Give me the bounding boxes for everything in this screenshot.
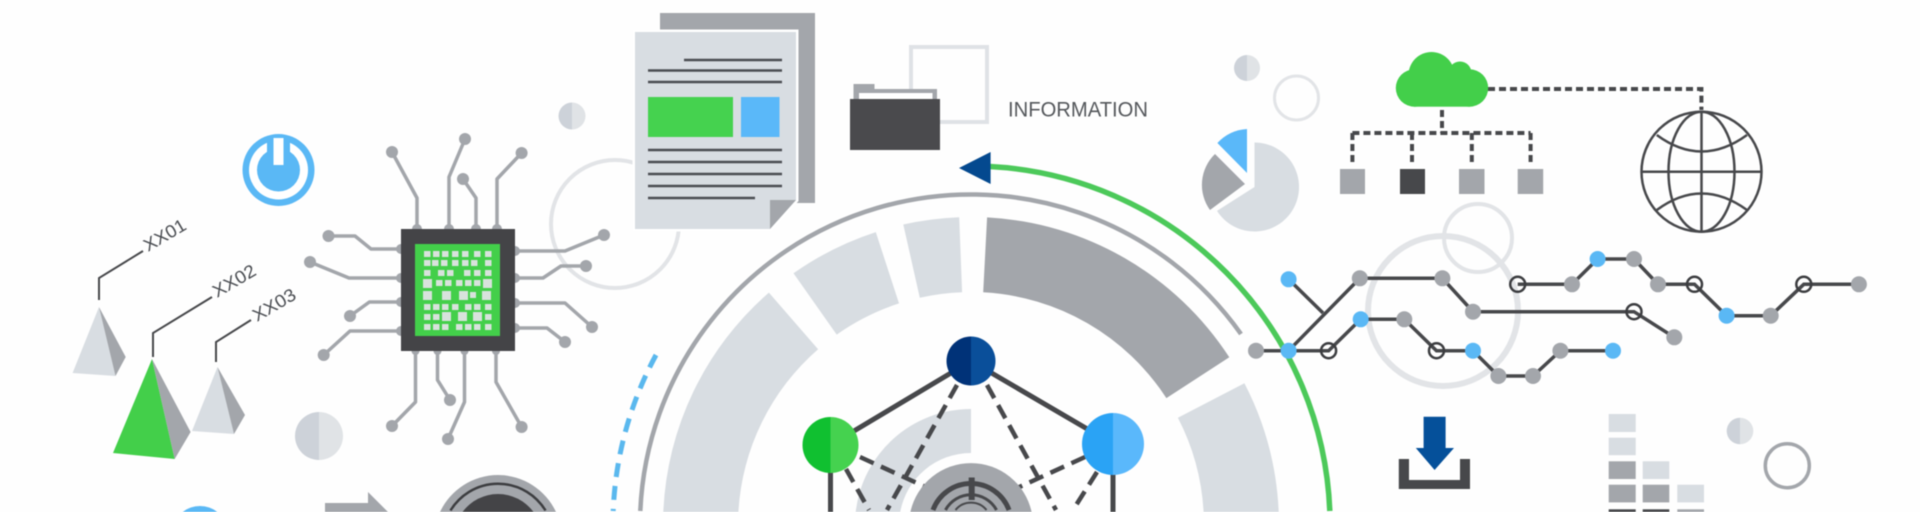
background ring behind document bbox=[551, 160, 679, 288]
chip die bbox=[415, 244, 500, 336]
decorative half circle lower left bbox=[295, 412, 343, 460]
network diagram bbox=[802, 336, 1144, 512]
folder front bbox=[850, 99, 940, 150]
pyramid XX03 bbox=[192, 367, 245, 434]
solid links bbox=[830, 361, 1113, 512]
open stations bbox=[1321, 277, 1811, 358]
arrow head bbox=[959, 152, 991, 184]
node: navy bbox=[946, 336, 996, 386]
dashed links bbox=[846, 385, 1097, 510]
folder tab bbox=[854, 84, 874, 92]
center target bbox=[910, 463, 1032, 512]
pie main slice bbox=[1217, 142, 1299, 232]
front page bbox=[635, 32, 796, 229]
bottom left blue circle bbox=[183, 506, 217, 512]
cloud hierarchy bbox=[1340, 52, 1701, 194]
decorative half circle bottom right bbox=[1727, 418, 1753, 444]
line paths bbox=[1256, 259, 1859, 376]
blue block bbox=[741, 97, 780, 137]
folder paper bbox=[859, 93, 932, 100]
label XX03: XX03 bbox=[249, 284, 300, 325]
green block bbox=[648, 97, 733, 137]
pyramid XX02 bbox=[113, 359, 191, 459]
blue stations bbox=[1281, 251, 1735, 359]
outline page bbox=[911, 47, 987, 122]
segment: upper left bbox=[794, 232, 899, 335]
icon: folder bbox=[850, 47, 987, 150]
segment: left bbox=[663, 293, 818, 512]
decorative half circle near document bbox=[559, 102, 585, 130]
bar chart bbox=[1609, 414, 1704, 512]
label XX02 bbox=[153, 260, 260, 357]
icon: power button bbox=[242, 134, 314, 206]
icon: globe bbox=[1642, 112, 1762, 232]
outer gray ring bbox=[640, 194, 1241, 511]
pie gray slice bbox=[1202, 154, 1245, 210]
page fold bbox=[770, 200, 796, 229]
main dial segments bbox=[640, 194, 1279, 512]
text lines bbox=[648, 60, 782, 198]
green arrow arc bbox=[959, 152, 1330, 511]
bottom left arrow bbox=[325, 492, 388, 512]
pyramid XX01 bbox=[73, 307, 126, 376]
back page bbox=[660, 13, 815, 203]
dashed connectors bbox=[1352, 89, 1701, 165]
chip data pattern bbox=[423, 251, 492, 330]
chip pins bbox=[304, 133, 610, 445]
segment: right bbox=[1178, 383, 1279, 512]
folder back bbox=[854, 89, 937, 100]
chip body bbox=[401, 229, 515, 351]
label: INFORMATION: INFORMATION bbox=[1008, 98, 1148, 122]
decorative ring bottom right bbox=[1765, 444, 1809, 488]
node: blue bbox=[1082, 413, 1144, 475]
arrow bbox=[1416, 417, 1454, 470]
pie chart bbox=[1202, 129, 1299, 232]
label XX03 bbox=[216, 284, 300, 362]
node: green bbox=[802, 417, 858, 473]
decorative half circle top right bbox=[1234, 55, 1260, 81]
label XX01 bbox=[99, 215, 190, 300]
inner arc bbox=[856, 409, 971, 512]
pyramids with labels bbox=[73, 215, 300, 459]
metro line diagram bbox=[1248, 251, 1867, 384]
green curve bbox=[990, 166, 1330, 511]
tray bbox=[1399, 459, 1470, 489]
background rings behind metro lines bbox=[1368, 204, 1518, 386]
blue dashed arc bbox=[613, 355, 656, 511]
decorative ring top right bbox=[1274, 76, 1318, 120]
label XX01: XX01 bbox=[140, 215, 190, 255]
bottom left dial bbox=[440, 475, 556, 512]
icon: cloud bbox=[1396, 52, 1488, 107]
icon: document pages bbox=[635, 13, 815, 229]
icon: microchip bbox=[304, 133, 610, 445]
gray stations bbox=[1248, 251, 1867, 384]
segment: dark top right bbox=[983, 217, 1229, 398]
icon: download bbox=[1399, 417, 1470, 489]
server squares bbox=[1340, 169, 1543, 194]
pie blue slice bbox=[1217, 129, 1247, 173]
segment: small top bbox=[903, 217, 962, 298]
label XX02: XX02 bbox=[209, 260, 260, 301]
